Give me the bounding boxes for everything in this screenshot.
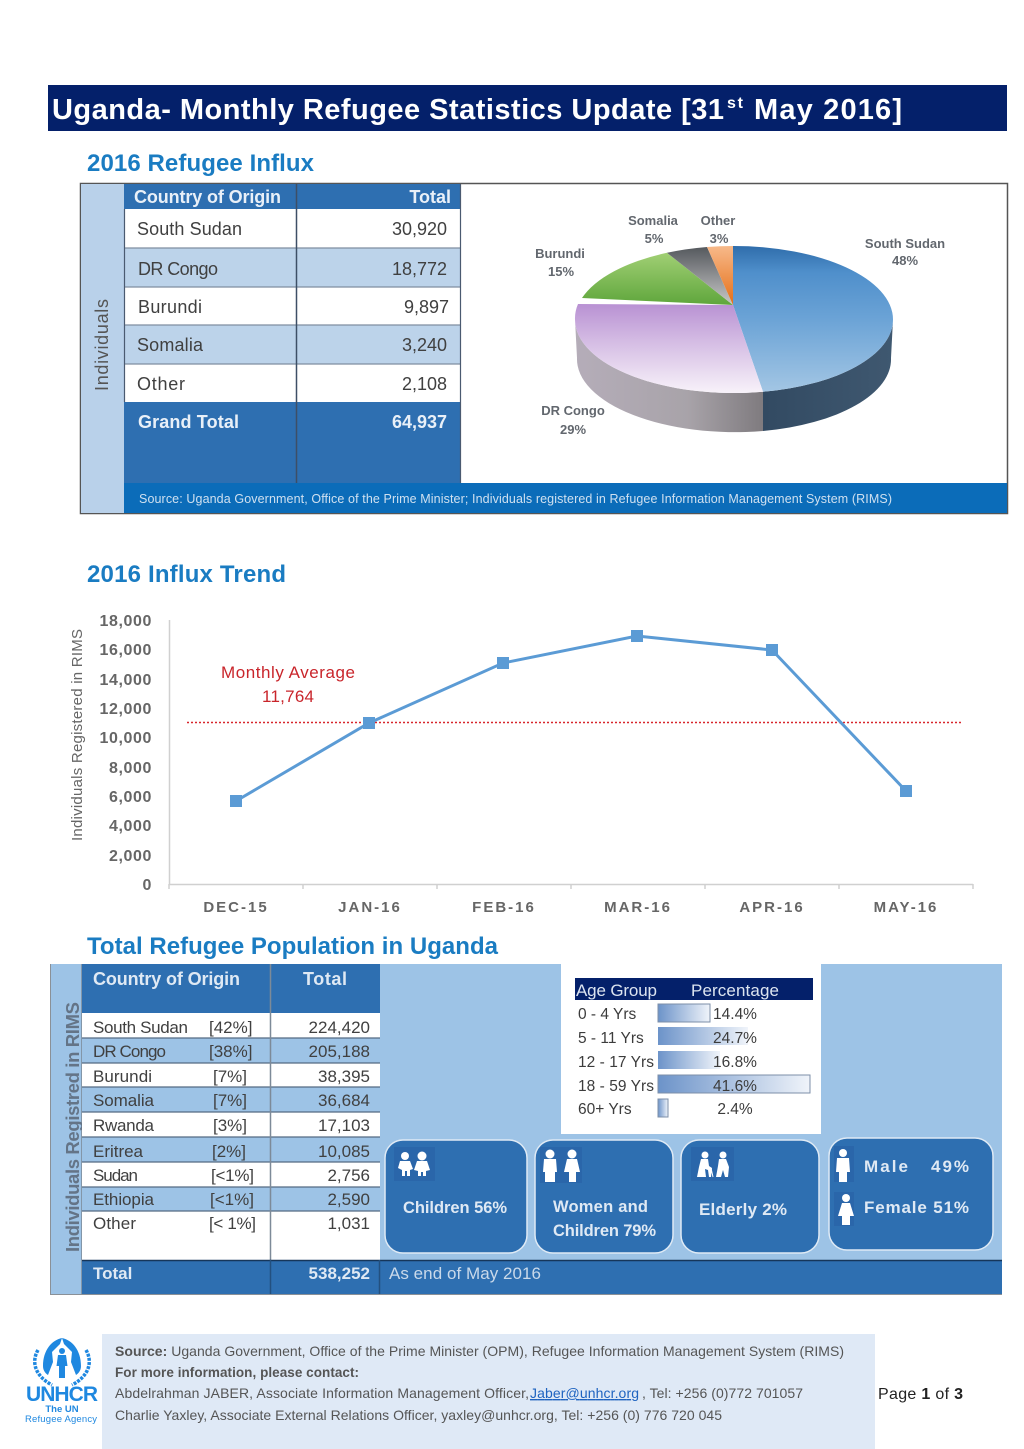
side band: Individuals Registred in RIMS [51, 964, 83, 1294]
monthly average line [187, 722, 963, 724]
total row [82, 1260, 1002, 1294]
monthly average label: Monthly Average [221, 663, 355, 682]
age group table: 12 - 17 Yrs [578, 1054, 654, 1071]
population table: [< 1%] [209, 1214, 256, 1233]
pie chart [535, 213, 945, 437]
population table: [42%] [209, 1018, 252, 1037]
title banner: Uganda- Monthly Refugee Statistics Update [31 [52, 94, 724, 126]
population table: Somalia [93, 1091, 155, 1110]
population table: [38%] [209, 1042, 252, 1061]
x axis labels: MAR-16 [604, 899, 672, 916]
population table: DR Congo [93, 1042, 166, 1061]
title banner [48, 85, 1007, 131]
pie chart: 5% [645, 231, 664, 246]
x axis labels: FEB-16 [472, 899, 536, 916]
y axis labels: 0 [142, 877, 152, 894]
influx table: Somalia [137, 335, 204, 355]
heading: 2016 Influx Trend: 2016 Influx Trend [87, 561, 286, 588]
population table: Country of Origin [93, 969, 240, 989]
population table: [<1%] [211, 1166, 254, 1185]
y axis labels: 12,000 [99, 701, 152, 718]
population table: [<1%] [210, 1190, 254, 1209]
population table: 10,085 [318, 1142, 370, 1161]
stat card: gender: Male [864, 1157, 908, 1176]
logo: UNHCR: Refugee Agency [25, 1414, 97, 1425]
icon: elderly [691, 1147, 734, 1181]
footer contact panel: , Tel: +256 (0)772 701057 [642, 1385, 803, 1401]
population table: 2,590 [327, 1190, 370, 1209]
influx table: 64,937 [392, 412, 447, 432]
age group table: Percentage [691, 981, 779, 1000]
x axis labels: APR-16 [739, 899, 805, 916]
laurel and sheltering hands [35, 1350, 89, 1385]
stat card: gender: Female 51% [864, 1198, 969, 1217]
monthly average label: 11,764 [262, 687, 314, 706]
side band: Individuals: Individuals [92, 299, 112, 391]
influx table: South Sudan [137, 219, 242, 239]
pie chart: Other [701, 213, 735, 228]
stat card: gender: 49% [931, 1157, 969, 1176]
panel: total refugee population [50, 964, 1002, 1294]
y axis labels: 14,000 [99, 672, 152, 689]
title banner: May 2016] [754, 94, 902, 126]
line chart: influx trend [69, 613, 973, 916]
population table: 2,756 [327, 1166, 370, 1185]
age group table: 60+ Yrs [578, 1101, 632, 1118]
pie chart: 48% [892, 253, 918, 268]
population table: [2%] [212, 1142, 246, 1161]
influx table: Country of Origin [134, 187, 281, 207]
x axis labels [203, 899, 938, 916]
age group table: Age Group [576, 981, 657, 1000]
influx table: Total [409, 187, 451, 207]
population table: Eritrea [93, 1142, 144, 1161]
age group table [561, 964, 821, 1134]
population table: 38,395 [318, 1067, 370, 1086]
age group table: 18 - 59 Yrs [578, 1078, 654, 1095]
footer contact panel: Abdelrahman JABER, Associate Information Management Officer, [115, 1385, 529, 1401]
source strip [124, 483, 1007, 513]
pie chart: DR Congo [541, 403, 605, 418]
heading: Total Refugee Population in Uganda: Total Refugee Population in Uganda [87, 933, 499, 960]
total row: As end of May 2016 [389, 1264, 541, 1283]
stat card: gender [829, 1138, 993, 1250]
x axis labels: JAN-16 [338, 899, 402, 916]
stat card: children [385, 1140, 527, 1253]
pie chart: Burundi [535, 246, 585, 261]
pie chart: 15% [548, 264, 574, 279]
total row: Total [93, 1264, 132, 1283]
population table: [7%] [213, 1067, 247, 1086]
x axis labels: MAY-16 [874, 899, 938, 916]
influx table: Grand Total [138, 412, 239, 432]
icon: female [834, 1192, 854, 1226]
influx table: 9,897 [404, 297, 449, 317]
population table: [3%] [213, 1116, 247, 1135]
stat card: elderly [681, 1140, 819, 1253]
footer contact panel: Jaber@unhcr.org [530, 1385, 639, 1401]
population table: 1,031 [327, 1214, 370, 1233]
population table: Total [303, 969, 347, 989]
stat card: elderly: Elderly 2% [699, 1200, 787, 1219]
population table: Sudan [93, 1166, 138, 1185]
x axis labels: DEC-15 [203, 899, 269, 916]
population table: 224,420 [309, 1018, 370, 1037]
logo: UNHCR [25, 1338, 98, 1425]
footer contact panel: Source: Uganda Government, Office of the Prime Minister (OPM), Refugee Information Management System (RIMS) [115, 1343, 844, 1359]
y axis labels: 10,000 [99, 730, 152, 747]
influx table: Burundi [138, 297, 202, 317]
pie chart: 29% [560, 422, 586, 437]
y axis labels: 6,000 [109, 789, 152, 806]
footer contact panel [102, 1334, 875, 1449]
logo: UNHCR: The UN [45, 1404, 79, 1415]
influx table [124, 184, 460, 483]
y axis labels [99, 613, 152, 894]
age group table: 41.6% [713, 1078, 757, 1095]
population table: 17,103 [318, 1116, 370, 1135]
age group table: 0 - 4 Yrs [578, 1006, 637, 1023]
panel: 2016 refugee influx [80, 184, 1008, 514]
y axis labels: 16,000 [99, 642, 152, 659]
y axis labels: 18,000 [99, 613, 152, 630]
influx table: DR Congo [138, 259, 218, 279]
influx table: 2,108 [402, 374, 447, 394]
y axis labels: 4,000 [109, 818, 152, 835]
population table: Other [93, 1214, 136, 1233]
logo: UNHCR: UNHCR [26, 1383, 98, 1406]
population table: Ethiopia [93, 1190, 155, 1209]
pie chart: South Sudan [865, 236, 945, 251]
age group table: 5 - 11 Yrs [578, 1030, 644, 1047]
footer contact panel: Charlie Yaxley, Associate External Relations Officer, yaxley@unhcr.org, Tel: +256 (0) 776 720 045 [115, 1407, 722, 1423]
icon: women and children [540, 1147, 582, 1183]
title banner: st [727, 95, 744, 112]
page number: Page 1 of 3 [878, 1386, 963, 1403]
age group table: 24.7% [713, 1030, 757, 1047]
data series [230, 630, 912, 807]
icon: children [394, 1147, 435, 1181]
icon: male [834, 1146, 854, 1182]
population table: 205,188 [309, 1042, 370, 1061]
age group table: 16.8% [713, 1054, 757, 1071]
influx table: 18,772 [392, 259, 447, 279]
y axis title: Individuals Registered in RIMS [69, 629, 86, 841]
y axis labels: 8,000 [109, 760, 152, 777]
monthly average label [221, 663, 355, 706]
population table [82, 964, 380, 1260]
age group table: 14.4% [713, 1006, 757, 1023]
pie chart: Somalia [628, 213, 679, 228]
population table: Rwanda [93, 1116, 155, 1135]
age group table: 2.4% [717, 1101, 753, 1118]
side band: Individuals [81, 184, 124, 513]
footer contact panel: For more information, please contact: [115, 1365, 359, 1380]
pie chart: 3% [710, 231, 729, 246]
source strip: Source: Uganda Government, Office of the Prime Minister; Individuals registered in Refugee Information Management System (RIMS) [139, 492, 892, 506]
stat card: children: Children 56% [403, 1199, 507, 1217]
population table: South Sudan [93, 1018, 188, 1037]
population table: 36,684 [318, 1091, 370, 1110]
population table: Burundi [93, 1067, 152, 1086]
population table: [7%] [213, 1091, 247, 1110]
y axis labels: 2,000 [109, 848, 152, 865]
influx table: 3,240 [402, 335, 447, 355]
heading: 2016 Refugee Influx: 2016 Refugee Influx [87, 150, 315, 177]
total row: 538,252 [309, 1264, 370, 1283]
stat card: women and children: Children 79% [553, 1222, 656, 1240]
influx table: 30,920 [392, 219, 447, 239]
stat card: women and children [535, 1140, 673, 1253]
side band: Individuals Registred in RIMS: Individuals Registred in RIMS [62, 1002, 83, 1252]
stat card: women and children: Women and [553, 1198, 648, 1216]
influx table: Other [137, 374, 185, 394]
